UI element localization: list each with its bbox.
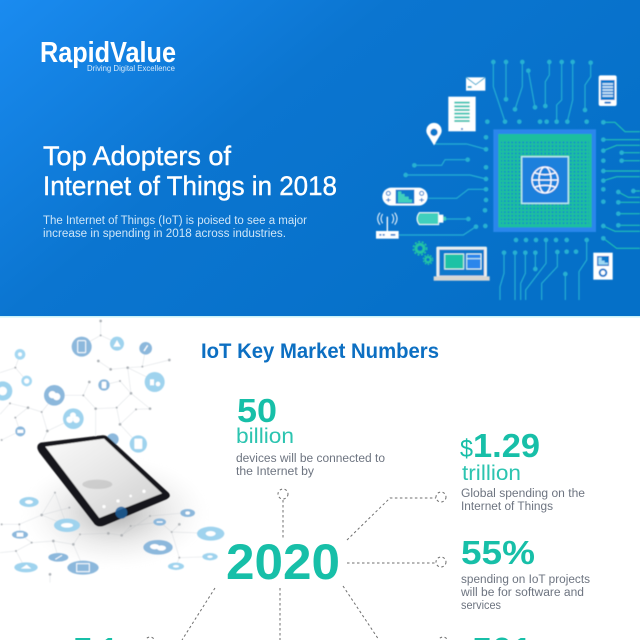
stat: 55%: will be for software and xyxy=(460,587,584,599)
panel: blue header background xyxy=(0,0,640,316)
icon: music player xyxy=(593,253,613,280)
title: Internet of Things in 2018 xyxy=(43,171,337,201)
heading: IoT Key Market Numbers: IoT Key Market Numbers xyxy=(201,340,439,363)
icon: smartphone xyxy=(599,75,617,106)
icon: cylinder device xyxy=(417,213,446,225)
network lines xyxy=(0,321,210,583)
stat: $1.29 trillion: $ xyxy=(460,435,473,463)
tablet shadow xyxy=(20,456,210,569)
intro text: increase in spending in 2018 across industries. xyxy=(43,228,286,240)
stat: $1.29 trillion xyxy=(460,427,585,513)
divider line under header xyxy=(0,316,640,318)
stat: 55%: spending on IoT projects xyxy=(461,574,590,586)
stat: $1.29 trillion: 1.29 xyxy=(473,427,540,464)
stat: $1.29 trillion: Global spending on the xyxy=(461,488,585,500)
stat: 50 billion devices: devices will be connected to xyxy=(236,453,385,465)
logo: RapidValue: Driving Digital Excellence xyxy=(87,63,175,73)
logo: RapidValue: RapidValue xyxy=(40,37,176,69)
stat: 50 billion devices: the Internet by xyxy=(236,466,314,478)
icon: globe xyxy=(532,167,558,193)
illustration: circuit chip and devices xyxy=(376,60,640,300)
title xyxy=(43,141,337,201)
illustration: tablet with device network xyxy=(0,320,224,583)
stat: 50 billion devices: 50 xyxy=(237,392,277,429)
icon: laptop xyxy=(434,247,490,281)
intro text: The Internet of Things (IoT) is poised to see a major xyxy=(43,215,307,227)
stat: 55%: 55% xyxy=(461,534,535,571)
stat: 50 billion devices: billion xyxy=(236,425,294,448)
network bubbles upper xyxy=(0,337,165,453)
icon: game console xyxy=(382,188,428,206)
stat: 55%: services xyxy=(461,600,501,612)
chip xyxy=(493,129,596,232)
stat: $1.29 trillion: Internet of Things xyxy=(461,501,553,513)
hub year: 2020: 2020 xyxy=(226,534,340,590)
stat: 55% xyxy=(460,534,590,612)
network bubbles lower xyxy=(12,497,224,575)
icon: location pin xyxy=(426,123,442,145)
intro text xyxy=(43,215,307,240)
icon: router xyxy=(376,213,399,239)
stat: $1.29 trillion: trillion xyxy=(462,462,521,485)
title: Top Adopters of xyxy=(43,141,231,171)
network nodes xyxy=(1,320,181,576)
icon: envelope xyxy=(466,77,485,91)
dashed connectors xyxy=(145,489,448,640)
circuit traces xyxy=(399,60,640,300)
icon: gears xyxy=(413,242,433,264)
tablet device xyxy=(37,435,170,526)
stat: 50 billion devices xyxy=(236,392,385,478)
icon: tablet xyxy=(448,97,476,131)
